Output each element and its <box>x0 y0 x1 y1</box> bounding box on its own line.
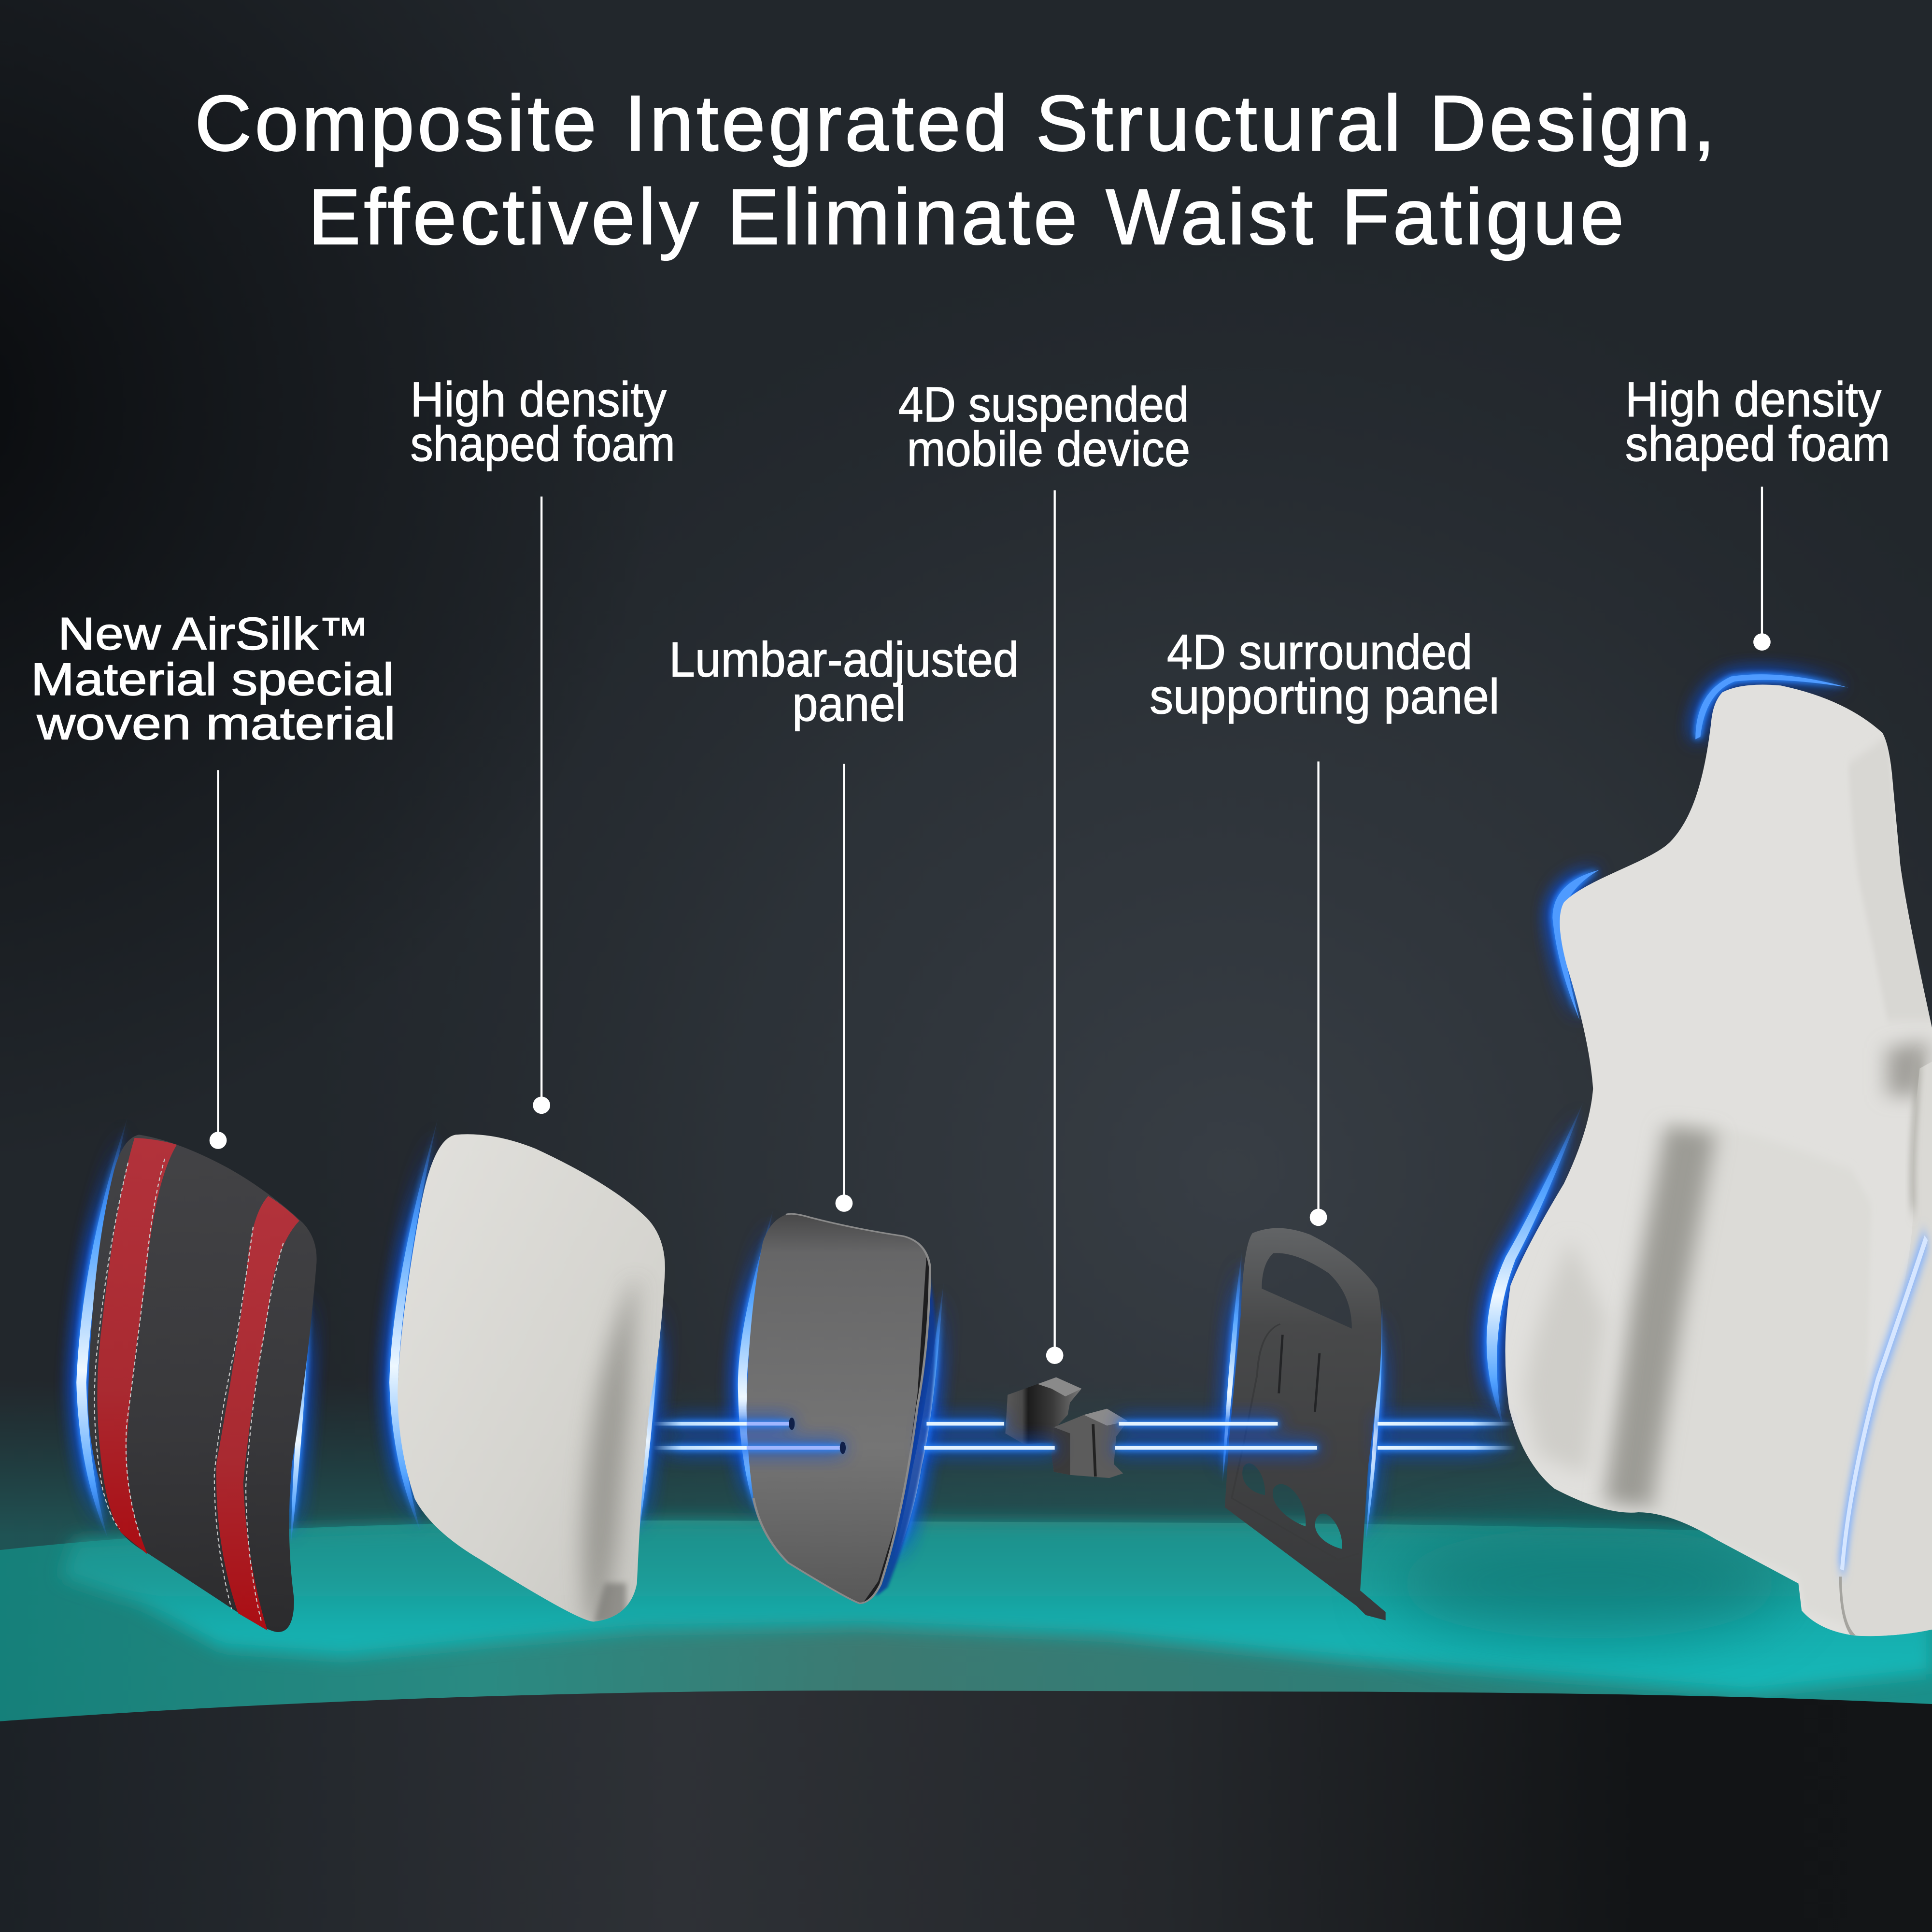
part: 4D surrounded supporting plate <box>1225 1228 1386 1620</box>
label: 4D surrounded supporting panel: supporting panel <box>1150 669 1500 724</box>
leader line: suspended device <box>1046 490 1064 1364</box>
blue light arcs behind parts <box>76 674 1848 1572</box>
label: New AirSilk material <box>31 609 396 750</box>
leader line: supporting panel <box>1310 762 1327 1226</box>
label: high density shaped foam (right): High density <box>1625 372 1881 427</box>
label: 4D surrounded supporting panel <box>1150 625 1500 724</box>
label: 4D suspended mobile device: mobile device <box>907 421 1190 476</box>
panel adjustment holes <box>789 1418 846 1454</box>
label: lumbar-adjusted panel <box>669 632 1019 731</box>
part: 4D suspended clips <box>1005 1378 1128 1478</box>
part: AirSilk woven cushion <box>88 1135 317 1632</box>
leader line: foam right <box>1753 487 1771 651</box>
title: Composite Integrated Structural Design, <box>195 79 1715 167</box>
part: full-size back foam <box>1505 685 1932 1638</box>
label: high density shaped foam (left): High density <box>410 372 667 427</box>
label: high density shaped foam (left) <box>410 372 675 471</box>
leader line: lumbar panel <box>836 764 852 1212</box>
title: Effectively Eliminate Waist Fatigue <box>308 172 1624 261</box>
label: 4D suspended mobile device: 4D suspended <box>898 377 1189 432</box>
leader line: foam left <box>533 497 550 1114</box>
label: New AirSilk material: woven material <box>36 699 396 750</box>
part: lumbar-adjusted panel <box>747 1214 936 1605</box>
leader line: airsilk <box>210 770 227 1149</box>
label: high density shaped foam (right) <box>1625 372 1890 471</box>
part: shaped foam pad <box>398 1134 665 1623</box>
blue connecting beams <box>653 1422 1516 1450</box>
label: 4D surrounded supporting panel: 4D surrounded <box>1167 625 1472 680</box>
label: lumbar-adjusted panel: panel <box>792 676 906 731</box>
label: 4D suspended mobile device <box>898 377 1190 476</box>
teal floor band <box>0 1520 1932 1932</box>
label: New AirSilk material: New AirSilk™ <box>58 609 369 659</box>
label: high density shaped foam (right): shaped foam <box>1625 416 1890 471</box>
label: New AirSilk material: Material special <box>31 654 394 705</box>
label: high density shaped foam (left): shaped foam <box>410 416 675 471</box>
title <box>195 79 1715 261</box>
label: lumbar-adjusted panel: Lumbar-adjusted <box>669 632 1019 687</box>
